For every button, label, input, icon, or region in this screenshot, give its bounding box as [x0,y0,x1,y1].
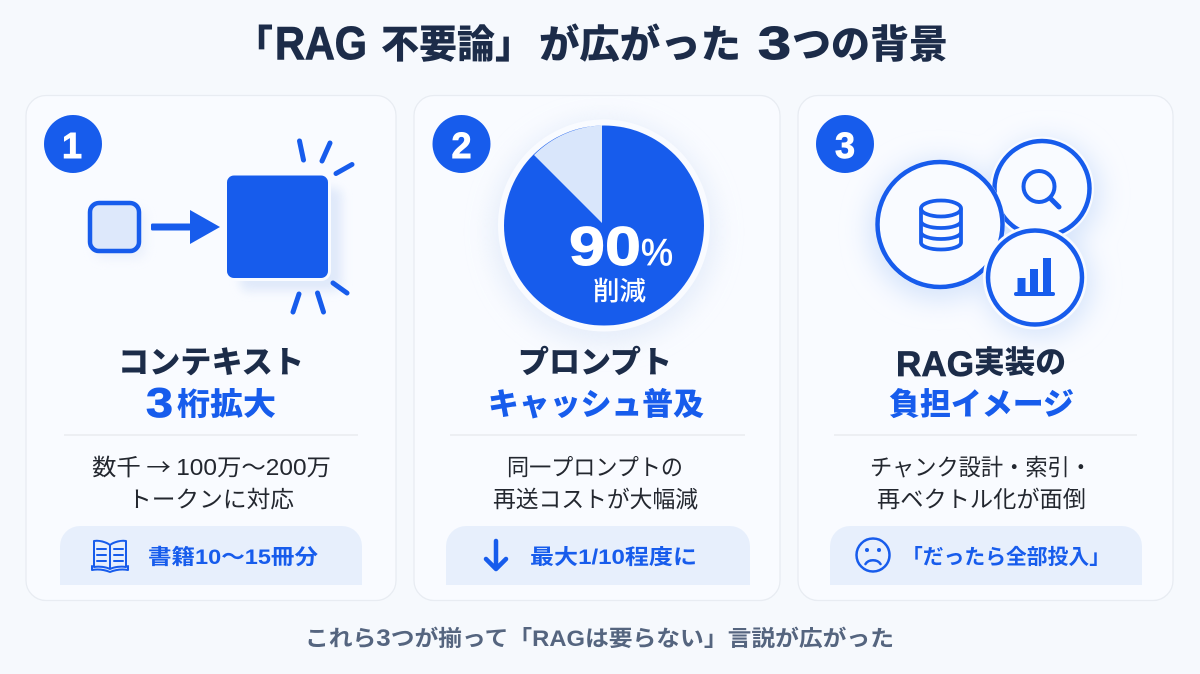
pie chart: 90% reduction: 90 [569,215,641,277]
panel: prompt cache [414,96,780,600]
description 2 [493,448,698,514]
heading 3 [889,337,1074,424]
panel: context expansion [26,96,396,600]
heading 3: 負担イメージ [889,379,1074,424]
title [234,14,948,70]
icon group: database, search, chart circles [869,136,1100,337]
icon: book [92,541,128,572]
callout 2: 最大 1/10 程度に [530,541,697,571]
badge 3 [816,115,874,173]
icon: sad face [856,538,890,572]
heading 1 [118,337,304,426]
badge 2 [432,115,490,173]
icon: down arrow [486,541,506,569]
panel: RAG burden [798,96,1173,600]
pie chart: 90% reduction: 削減 [593,271,646,308]
badge 2: 2 [451,125,472,166]
callout 3 [830,526,1142,585]
heading 3: RAG [896,345,974,384]
heading 1: 3 [146,379,173,426]
pie chart: 90% reduction: % [641,232,673,274]
heading 3: 実装の [974,337,1066,382]
description 2: 再送コストが大幅減 [493,480,698,514]
circle: database [875,160,1005,290]
heading 1: 桁拡大 [177,379,276,424]
description 3: チャンク設計・索引・ [870,448,1092,482]
heading 2: キャッシュ普及 [488,379,704,424]
callout 2 [446,526,750,585]
title: が広がった [539,14,741,70]
description 1: トークンに対応 [128,480,294,514]
badge 1 [44,115,102,173]
title: RAG [275,17,367,69]
callout 3: 「だったら全部投入」 [902,541,1110,571]
circle: bar chart [983,226,1087,330]
pie chart: 90% reduction [492,120,716,344]
description 1 [92,448,331,514]
title: 3 [758,17,791,69]
description 3: 再ベクトル化が面倒 [877,480,1086,514]
heading 1: コンテキスト [118,337,304,382]
callout 1: 書籍10〜15冊分 [148,541,318,571]
circle: search [990,136,1094,240]
footer note: これら3つが揃って「 RAGは要らない」言説が広がった [305,621,894,653]
callout 1 [60,526,362,585]
heading 2 [488,337,704,424]
badge 1: 1 [62,125,82,166]
title: つの背景 [792,14,948,70]
description 2: 同一プロンプトの [507,448,683,482]
description 1: 数千 → 100万〜200万 [92,448,331,482]
title: 「 [234,14,273,70]
heading 2: プロンプト [518,337,672,382]
icon: small square grows to large square [90,141,352,312]
title: 不要論」 [381,14,533,70]
badge 3: 3 [835,125,855,166]
description 3 [870,448,1092,514]
